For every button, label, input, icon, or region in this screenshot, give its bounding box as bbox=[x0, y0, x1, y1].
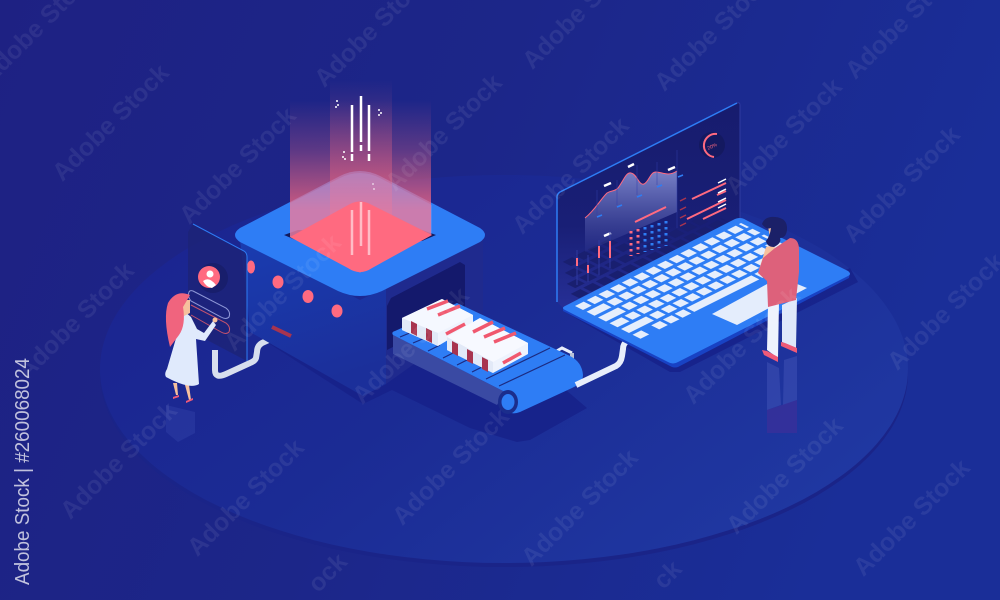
watermarks: ck bbox=[648, 555, 688, 594]
watermarks: Adobe Stock bbox=[380, 69, 508, 197]
watermarks: Adobe Stock bbox=[516, 444, 644, 572]
dot matrix bbox=[631, 221, 666, 256]
hair and beard bbox=[762, 217, 787, 247]
watermarks: Adobe Stock bbox=[47, 59, 175, 187]
roller cap bbox=[498, 390, 518, 414]
keyboard reflection grid bbox=[529, 202, 738, 307]
machine opening bbox=[387, 262, 465, 350]
hole bbox=[284, 230, 436, 241]
box 1 bbox=[402, 299, 473, 346]
login panel bbox=[188, 224, 247, 361]
laptop screen bbox=[529, 103, 740, 308]
watermarks: ock bbox=[303, 548, 353, 598]
watermarks: Adobe Stock bbox=[838, 121, 966, 249]
avatar bbox=[198, 263, 228, 293]
red glow floor bbox=[290, 202, 432, 272]
watermarks: Adobe Stock bbox=[219, 229, 347, 357]
watermarks: Adobe Stock bbox=[174, 102, 302, 230]
gauge bbox=[699, 132, 725, 158]
woman reflection bbox=[166, 405, 195, 442]
data streaks bbox=[352, 96, 369, 255]
watermarks: Adobe Stock bbox=[848, 454, 976, 582]
watermarks: Adobe Stock bbox=[721, 412, 849, 540]
arm bbox=[758, 245, 775, 281]
form fields bbox=[188, 291, 230, 334]
legs bbox=[767, 302, 779, 358]
shadows under machine and laptop bbox=[248, 268, 858, 442]
trackpad bbox=[712, 277, 807, 325]
machine left face bbox=[240, 240, 386, 396]
watermarks: Adobe Stock bbox=[182, 434, 310, 562]
face bbox=[768, 226, 778, 245]
conveyor bracket bbox=[555, 348, 572, 360]
watermarks: Adobe Stock bbox=[507, 112, 635, 240]
laptop base bbox=[563, 218, 850, 364]
woman bbox=[165, 293, 218, 403]
machine bbox=[235, 78, 485, 396]
watermarks: Adobe Stock bbox=[387, 403, 515, 531]
belt slats bbox=[400, 332, 565, 386]
watermarks: Adobe Stock bbox=[55, 397, 183, 525]
bar lines bbox=[635, 183, 726, 222]
man reflection bbox=[767, 356, 797, 433]
shoes bbox=[173, 395, 193, 403]
hand bbox=[212, 318, 218, 322]
candle bars bbox=[577, 232, 610, 285]
hair bbox=[166, 293, 190, 347]
right cable bbox=[576, 341, 627, 385]
machine right face bbox=[386, 238, 483, 384]
indicator lights bbox=[247, 260, 342, 318]
legs bbox=[173, 383, 191, 400]
face bbox=[181, 300, 190, 316]
conveyor side bbox=[393, 335, 505, 405]
coat bbox=[165, 311, 216, 386]
keyboard bbox=[579, 225, 802, 337]
shoes bbox=[762, 342, 797, 362]
row labels bbox=[680, 198, 686, 226]
sparkles bbox=[335, 100, 382, 190]
gauge: 20% bbox=[707, 142, 719, 152]
man bbox=[758, 217, 799, 362]
watermarks: Adobe Stock bbox=[12, 257, 140, 385]
belt and roller bbox=[392, 303, 583, 413]
watermarks: Adobe Stock bbox=[678, 282, 806, 410]
white ticks bbox=[718, 179, 726, 208]
shirt bbox=[758, 238, 799, 307]
watermarks: Adobe Stock bbox=[720, 73, 848, 201]
platform disc bbox=[100, 175, 908, 567]
light beams bbox=[290, 78, 432, 273]
cable slot bbox=[272, 327, 291, 336]
laptop base edge bbox=[563, 273, 850, 368]
stock id label: Adobe Stock | #260068024 bbox=[12, 358, 34, 585]
area chart bbox=[585, 150, 683, 252]
box 2 bbox=[447, 318, 528, 373]
left cable bbox=[215, 333, 284, 376]
laptop bbox=[529, 103, 850, 368]
machine top face bbox=[235, 171, 485, 296]
conveyor bbox=[392, 299, 583, 414]
watermarks: Adobe Stock bbox=[347, 282, 475, 410]
